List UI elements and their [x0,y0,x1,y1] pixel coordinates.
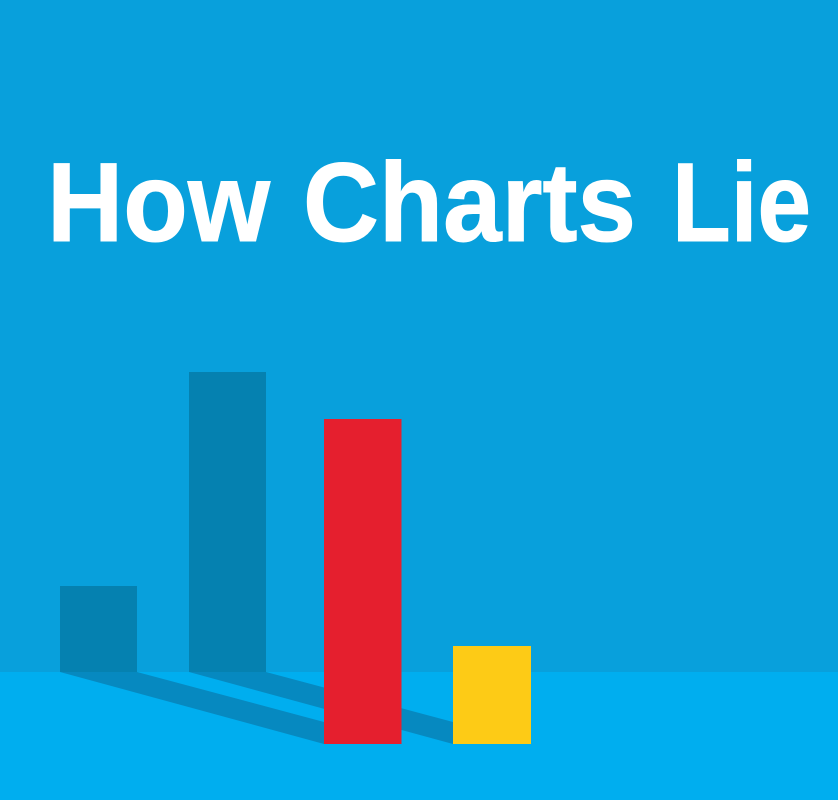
yellow bar [453,646,531,744]
bar chart [60,372,531,744]
floor [0,672,838,800]
floor shadow: tall bar [189,672,453,744]
floor shadow: short bar [60,672,324,744]
shadow bar: short [60,586,137,672]
title: Charts [303,140,636,265]
red bar [324,419,402,744]
shadow bar: tall [189,372,266,672]
title: Lie [672,140,811,265]
title: How [47,140,271,265]
